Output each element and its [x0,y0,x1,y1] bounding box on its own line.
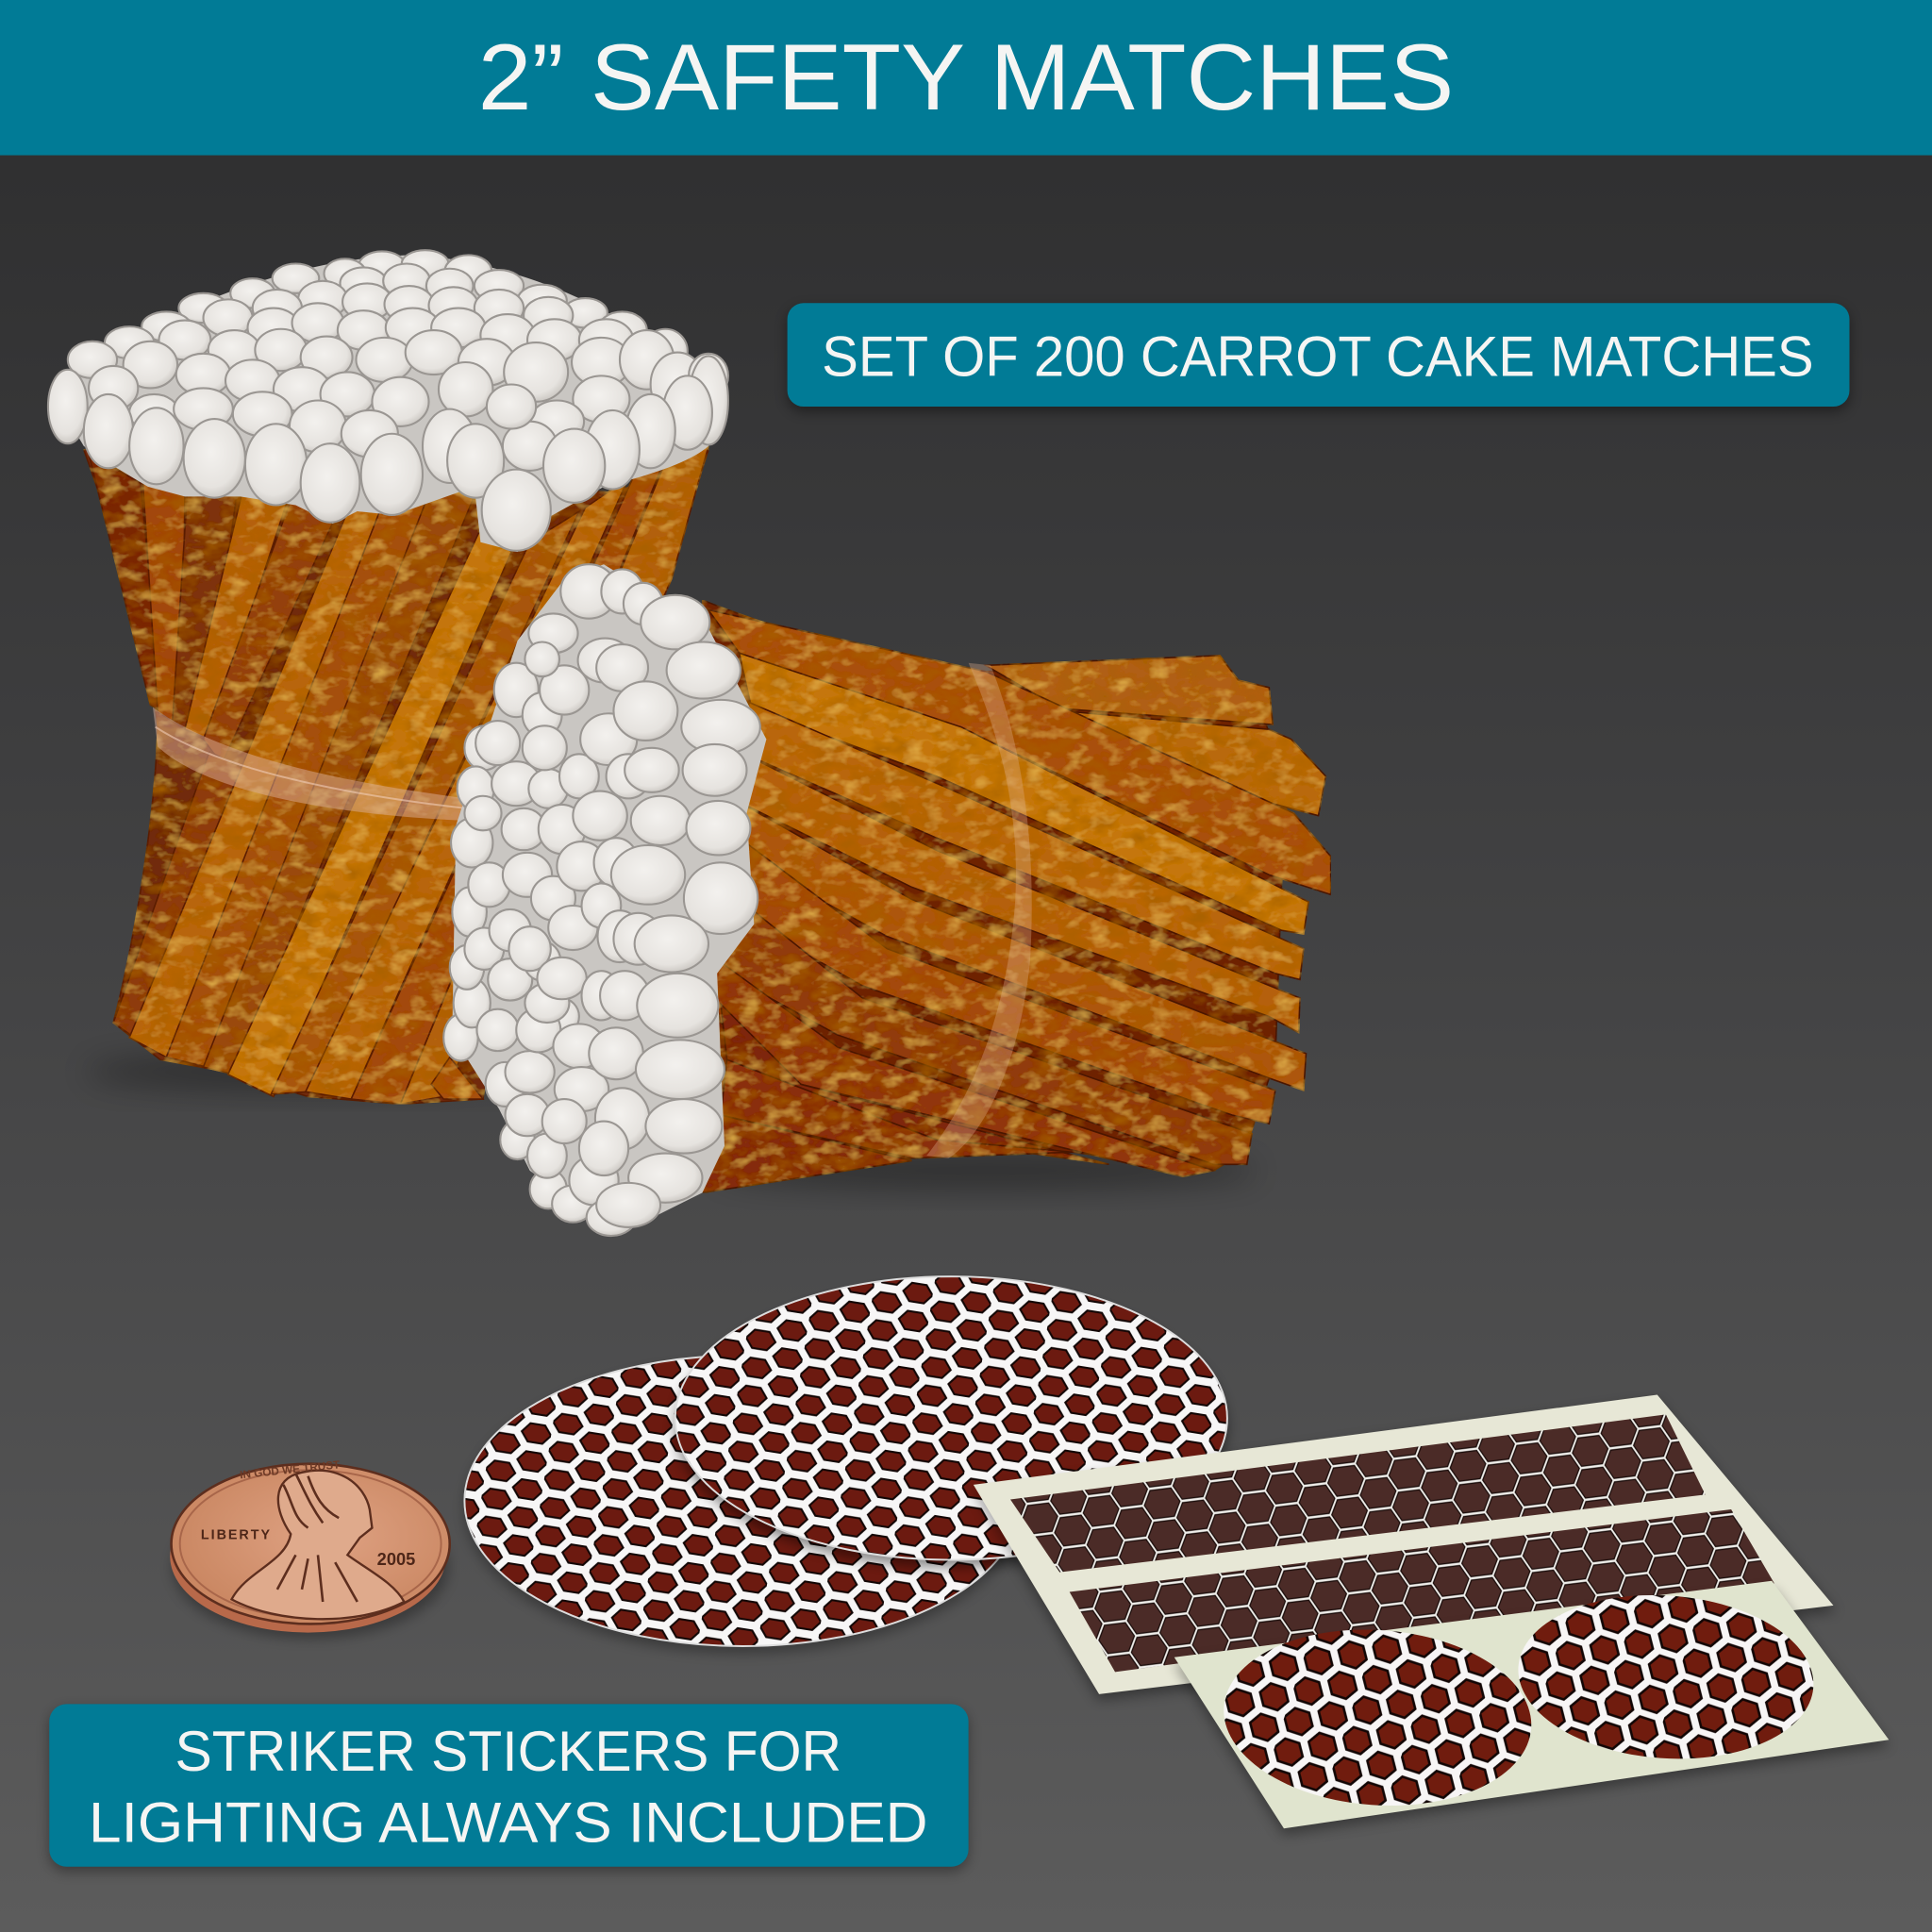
circle sticker right [1513,1586,1819,1769]
striker strip sheet [974,1395,1836,1700]
president bust [232,1471,404,1619]
lying bundle match heads [443,564,766,1236]
penny coin: 2005 [377,1549,415,1569]
lying match bundle [443,564,1331,1236]
penny coin [170,1458,450,1639]
coin lettering: LIBERTY [201,1527,270,1542]
callout: striker stickers [49,1704,969,1872]
standing match bundle [48,250,728,1104]
callout: set of 200: SET OF 200 CARROT CAKE MATCHES [822,325,1814,388]
standing bundle sticks [84,446,708,1104]
title: 2” SAFETY MATCHES [478,25,1454,130]
strip one [1010,1414,1706,1573]
round striker sticker, front [675,1276,1227,1567]
sticker sheet with two circles [1174,1581,1889,1835]
standing bundle match heads [48,250,728,552]
lying bundle rubber band [926,663,1032,1158]
circle sticker left [1218,1620,1538,1816]
strip two [1070,1509,1774,1672]
callout: set of 200 [788,303,1849,411]
lying bundle sticks [702,600,1331,1192]
callout: striker stickers: LIGHTING ALWAYS INCLUDED [89,1791,928,1855]
penny coin: IN GOD WE TRUST [240,1458,341,1481]
callout: striker stickers: STRIKER STICKERS FOR [175,1720,841,1783]
round striker sticker, rear [464,1356,1022,1654]
header band with title [0,0,1932,156]
rubber band [153,708,466,821]
